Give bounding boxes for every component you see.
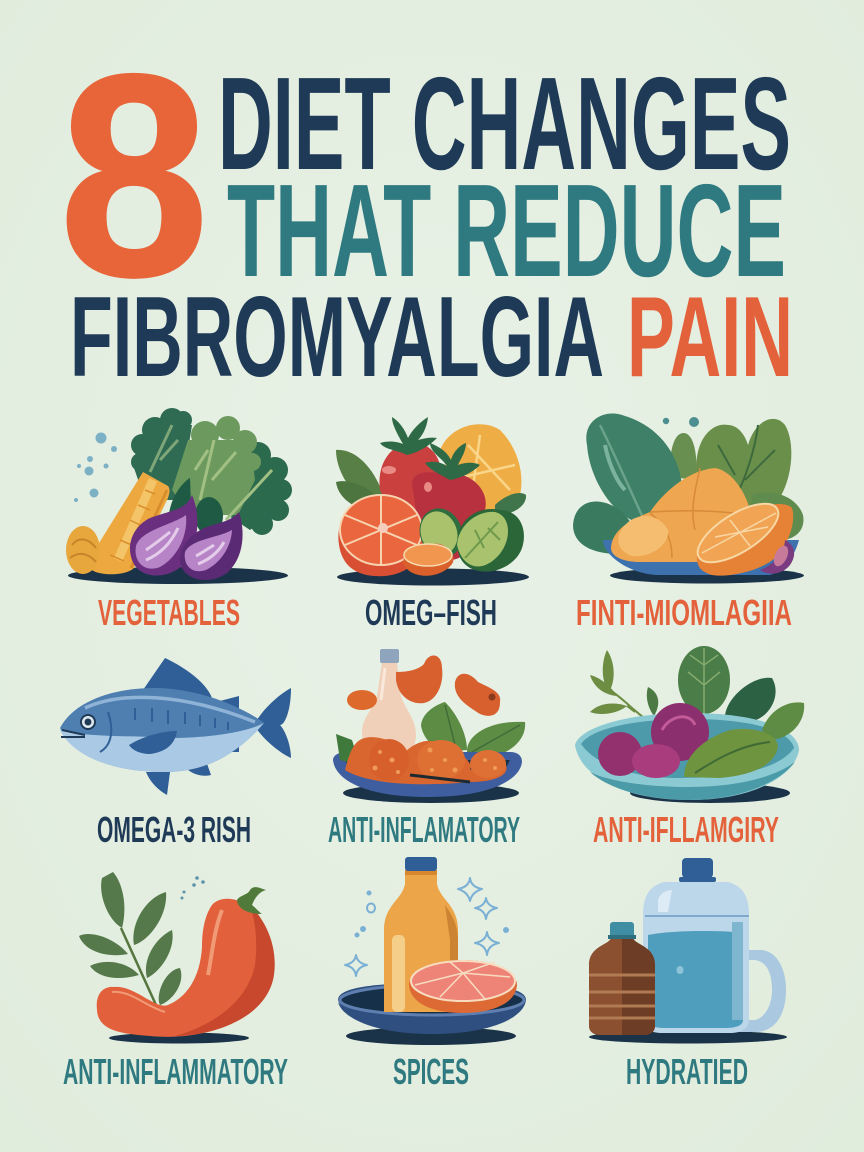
panel: vegetables (66, 408, 292, 633)
label: ANTI-INFLAMATORY (328, 809, 520, 850)
icon: vegetables (66, 408, 292, 584)
icon: bottle with grapefruit in bowl (338, 857, 526, 1045)
panel: fibromyalgia greens (573, 414, 804, 633)
panel: hydrated (589, 858, 787, 1092)
label: ANTI-INFLAMMATORY (63, 1051, 288, 1092)
panel: omega fish (336, 417, 529, 633)
icon: plate with chunks and bottle (333, 649, 525, 803)
icon: chili pepper and sprig (79, 872, 275, 1044)
icon: fish (60, 658, 291, 795)
numeral 8: 8 (59, 15, 209, 337)
icon: bowl with beets and greens (575, 646, 804, 803)
panel: spices (338, 857, 526, 1092)
label: OMEGA-3 RISH (97, 809, 251, 850)
panel: anti-inflamatory plate (328, 649, 525, 850)
panel: pepper (63, 872, 288, 1092)
icon: fruit group (336, 417, 529, 586)
label: OMEG–FISH (365, 592, 497, 633)
icon: greens and squash in bowl (573, 414, 804, 584)
label: HYDRATIED (626, 1051, 748, 1092)
label: VEGETABLES (98, 592, 240, 633)
panel: anti-inflammatory bowl (575, 646, 804, 850)
icon: water jug and brown bottle (589, 858, 787, 1044)
label: SPICES (393, 1051, 469, 1092)
panel: omega-3 fish (60, 658, 291, 850)
title (59, 15, 793, 401)
